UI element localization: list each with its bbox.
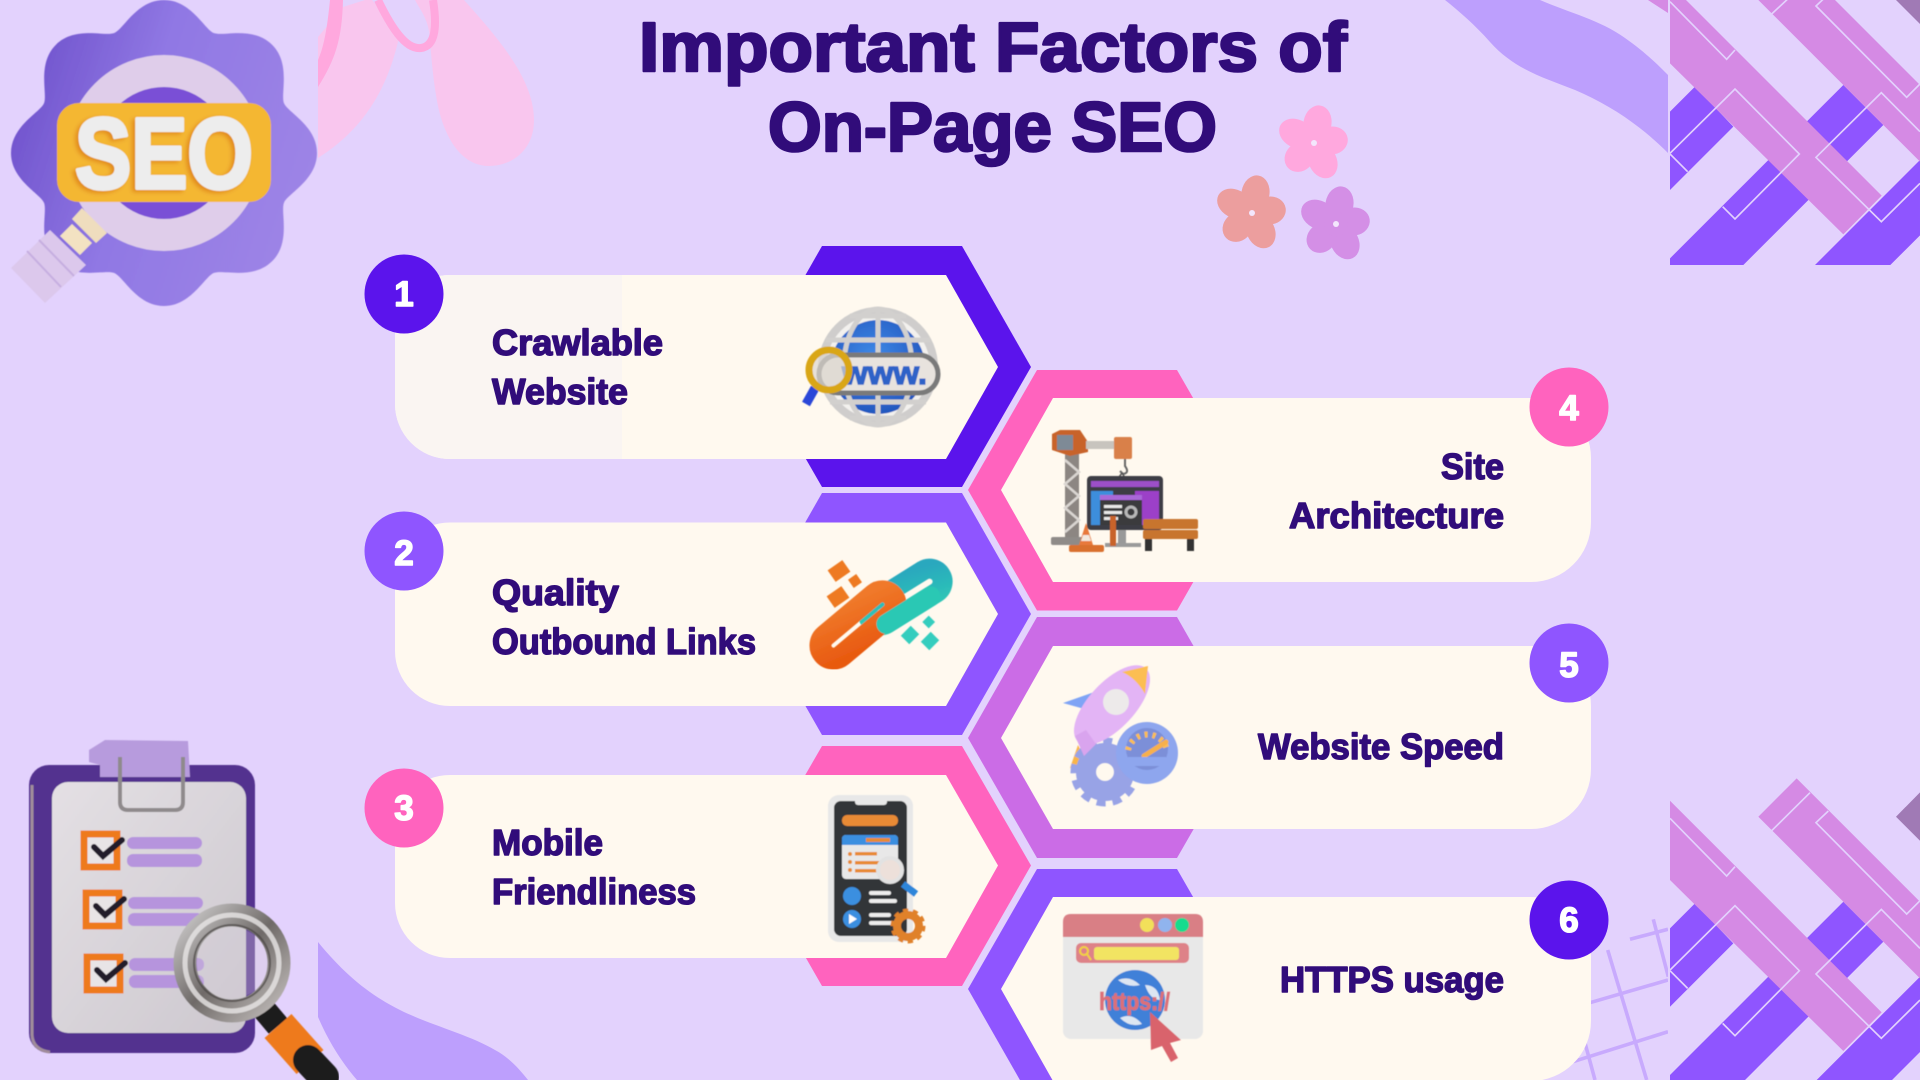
panel: 3 Mobile Friendliness: 3 — [394, 789, 414, 828]
panel: 1 Crawlable Website: Website — [492, 371, 628, 412]
title: On-Page SEO — [768, 88, 1217, 166]
panel: 6 HTTPS usage — [968, 869, 1608, 1080]
panel: 1 Crawlable Website — [364, 246, 1031, 487]
icon: SEO badge with magnifier — [0, 0, 330, 310]
checklist rows — [84, 834, 204, 990]
panel: 1 Crawlable Website: Crawlable — [492, 322, 663, 363]
icon: https browser window — [1063, 914, 1203, 1062]
decorative flower: lilac — [1296, 184, 1372, 264]
icon: SEO badge with magnifier: SEO — [75, 98, 253, 210]
panel: 3 Mobile Friendliness: Friendliness — [492, 871, 696, 912]
panel: 2 Quality Outbound Links: Quality — [492, 572, 619, 613]
decorative lilac wave, bottom left — [318, 942, 528, 1080]
panel: 3 Mobile Friendliness: Mobile — [492, 822, 603, 863]
panel: 4 Site Architecture: Architecture — [1289, 495, 1504, 536]
icon: site under construction — [1051, 430, 1198, 552]
geometric pattern, bottom right — [1670, 778, 1920, 1080]
panel: 5 Website Speed — [968, 617, 1608, 858]
panel: 2 Quality Outbound Links: 2 — [394, 534, 414, 573]
panel: 2 Quality Outbound Links: Outbound Links — [492, 621, 756, 662]
panel: 1 Crawlable Website: 1 — [394, 275, 414, 314]
icon: rocket with speed gauge — [1061, 653, 1178, 803]
panel: 4 Site Architecture: Site — [1441, 446, 1504, 487]
title: Important Factors of — [639, 8, 1348, 86]
panel: 5 Website Speed: Website Speed — [1258, 726, 1504, 767]
panel: 5 Website Speed: 5 — [1559, 646, 1579, 685]
icon: https browser window: https:// — [1099, 988, 1170, 1016]
panel: 2 Quality Outbound Links — [364, 493, 1031, 735]
panel: 6 HTTPS usage: 6 — [1559, 901, 1579, 940]
icon: www globe: www. — [841, 355, 927, 391]
decorative pink petals, top — [318, 0, 534, 166]
panel: 4 Site Architecture — [968, 368, 1608, 610]
geometric pattern, top right — [1670, 0, 1920, 267]
icon: mobile phone — [828, 795, 923, 942]
decorative flower: salmon — [1212, 173, 1288, 253]
panel: 3 Mobile Friendliness — [364, 746, 1031, 986]
decorative flower: pink — [1274, 103, 1350, 183]
icon: chain link — [815, 560, 948, 664]
panel: 4 Site Architecture: 4 — [1559, 389, 1579, 428]
icon: clipboard checklist with magnifier — [29, 740, 324, 1077]
title — [639, 8, 1348, 166]
icon: www globe — [806, 307, 938, 427]
panel: 6 HTTPS usage: HTTPS usage — [1280, 959, 1504, 1000]
decorative lilac wave, top right — [1445, 0, 1668, 153]
magnifier — [185, 915, 324, 1077]
decorative grid lines, bottom right — [1573, 919, 1668, 1080]
